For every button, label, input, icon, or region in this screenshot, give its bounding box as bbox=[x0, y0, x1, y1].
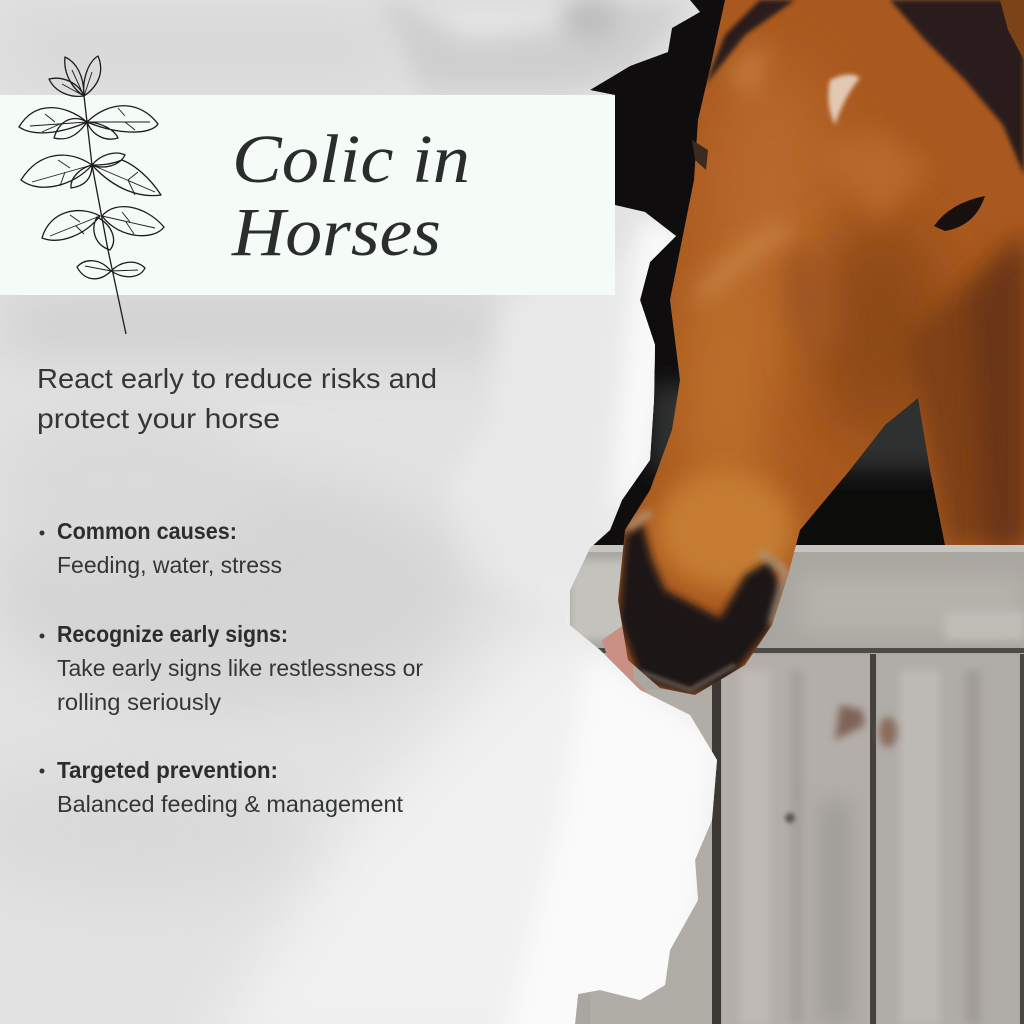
stable door with fence rail bbox=[570, 545, 1024, 1024]
mane bbox=[705, 0, 1024, 175]
subtitle: protect your horse bbox=[37, 403, 280, 434]
bullet: early signs: Take early signs like restlessness or bbox=[57, 655, 423, 681]
bullet: common causes: Common causes: bbox=[57, 518, 237, 544]
title: Colic in bbox=[232, 121, 470, 197]
bullet: early signs bbox=[40, 621, 423, 715]
left eye hint bbox=[692, 140, 708, 170]
bullet: prevention: Targeted prevention: bbox=[57, 757, 278, 783]
horse eye bbox=[934, 196, 985, 231]
muzzle bbox=[618, 522, 782, 695]
bullet: prevention bbox=[40, 757, 404, 817]
title banner bbox=[0, 95, 615, 295]
background: dark stable bbox=[580, 0, 1024, 560]
bullet: common causes: Feeding, water, stress bbox=[57, 552, 282, 578]
bullet: common causes bbox=[40, 518, 282, 578]
bullet: prevention: Balanced feeding & management bbox=[57, 791, 404, 817]
title: Horses bbox=[231, 194, 441, 270]
subtitle bbox=[37, 363, 437, 434]
horse head bbox=[600, 0, 1024, 720]
bullet: early signs: rolling seriously bbox=[57, 689, 222, 715]
title bbox=[231, 121, 470, 270]
icon: herb sprig bbox=[19, 56, 164, 334]
bullet: early signs: Recognize early signs: bbox=[57, 621, 288, 647]
watercolor panel bbox=[0, 0, 720, 1024]
subtitle: React early to reduce risks and bbox=[37, 363, 437, 394]
horse tongue bbox=[602, 622, 648, 692]
